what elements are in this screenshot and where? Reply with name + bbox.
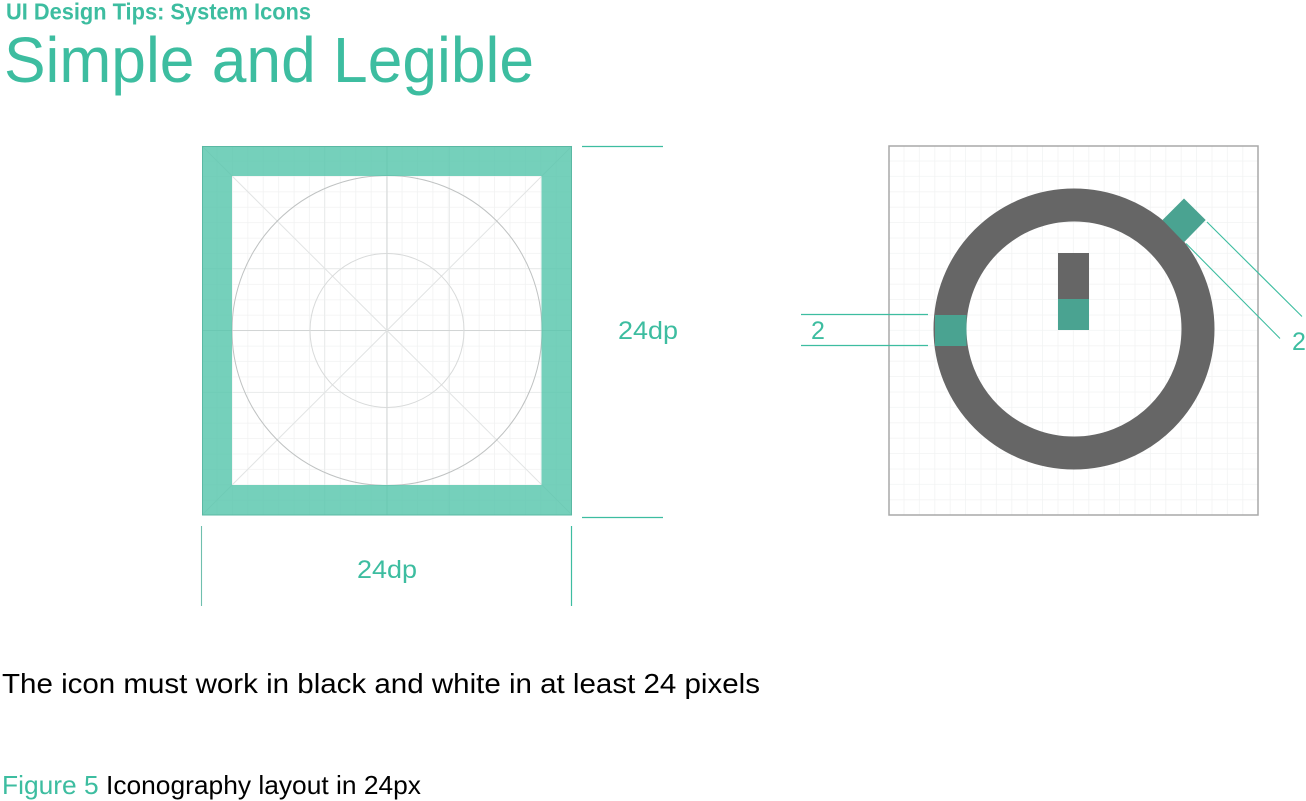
ring highlight left [935, 315, 966, 346]
diagonal measure lines [1186, 222, 1302, 338]
dimension lines: width [202, 526, 572, 606]
label: 2 left: 2 [811, 317, 825, 345]
hand highlight [1058, 299, 1089, 330]
label: 24dp height: 24dp [618, 317, 678, 345]
figure caption: Figure 5 Iconography layout in 24px [2, 770, 421, 800]
small keyline circle [310, 254, 464, 408]
teal padding frame [202, 146, 572, 515]
panel: keyline grid [202, 146, 572, 515]
icon frame [889, 146, 1258, 515]
title: Simple and Legible [4, 24, 534, 96]
frame outline [202, 146, 572, 515]
grid lines [202, 146, 572, 515]
large keyline circle [232, 176, 542, 486]
diamond highlight [1162, 198, 1206, 242]
clock ring [950, 205, 1198, 453]
label: 2 right: 2 [1292, 328, 1306, 356]
body text: The icon must work in black and white in at least 24 pixels [2, 668, 760, 699]
dimension lines: height [582, 146, 663, 518]
icon grid [889, 146, 1258, 515]
clock hand [1058, 253, 1089, 299]
left measure lines [801, 314, 928, 346]
label: 24dp width: 24dp [357, 556, 417, 584]
panel: clock icon [889, 146, 1258, 515]
